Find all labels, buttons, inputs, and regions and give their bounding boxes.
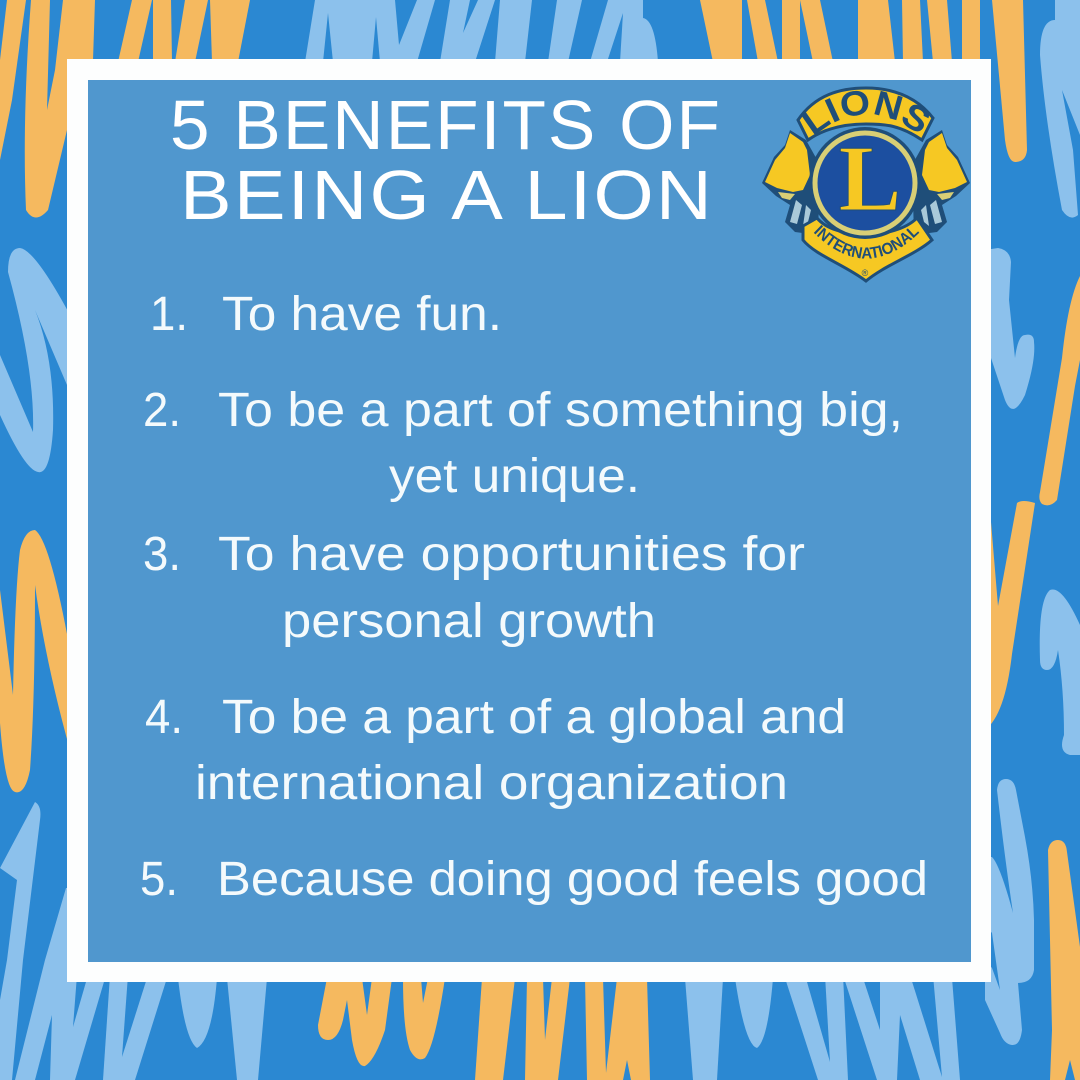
benefit 3 (143, 528, 805, 648)
benefit 4 (145, 691, 846, 810)
title: BEING A LION (180, 156, 714, 234)
benefit 2: To be a part of something big, (218, 384, 903, 437)
benefit 1: 1. (150, 288, 188, 341)
benefit 1: To have fun. (222, 288, 502, 341)
left lion (762, 130, 820, 235)
white frame panel (67, 59, 991, 982)
benefit 3: To have opportunities for (218, 528, 805, 581)
icon: Lions International logo (762, 86, 970, 283)
emblem ring (809, 127, 921, 239)
benefit 4: To be a part of a global and (222, 691, 846, 744)
banners (798, 88, 933, 140)
benefit 4: 4. (145, 691, 183, 744)
icon: Lions International logo: LIONS (802, 90, 929, 134)
benefit 3: 3. (143, 528, 181, 581)
benefit 2 (143, 384, 903, 503)
icon: Lions International logo: INTERNATIONAL (814, 225, 920, 258)
benefit 4: international organization (195, 757, 788, 810)
title (170, 86, 722, 234)
benefit 5: 5. (140, 853, 178, 906)
benefit 2: 2. (143, 384, 181, 437)
benefit 5: Because doing good feels good (217, 853, 928, 906)
blue content panel (88, 80, 971, 962)
icon: Lions International logo: ® (862, 268, 869, 278)
right lion (912, 130, 970, 235)
emblem letter: L (839, 127, 901, 231)
benefit 2: yet unique. (389, 450, 640, 503)
title: 5 BENEFITS OF (170, 86, 722, 164)
benefit 3: personal growth (282, 595, 656, 648)
